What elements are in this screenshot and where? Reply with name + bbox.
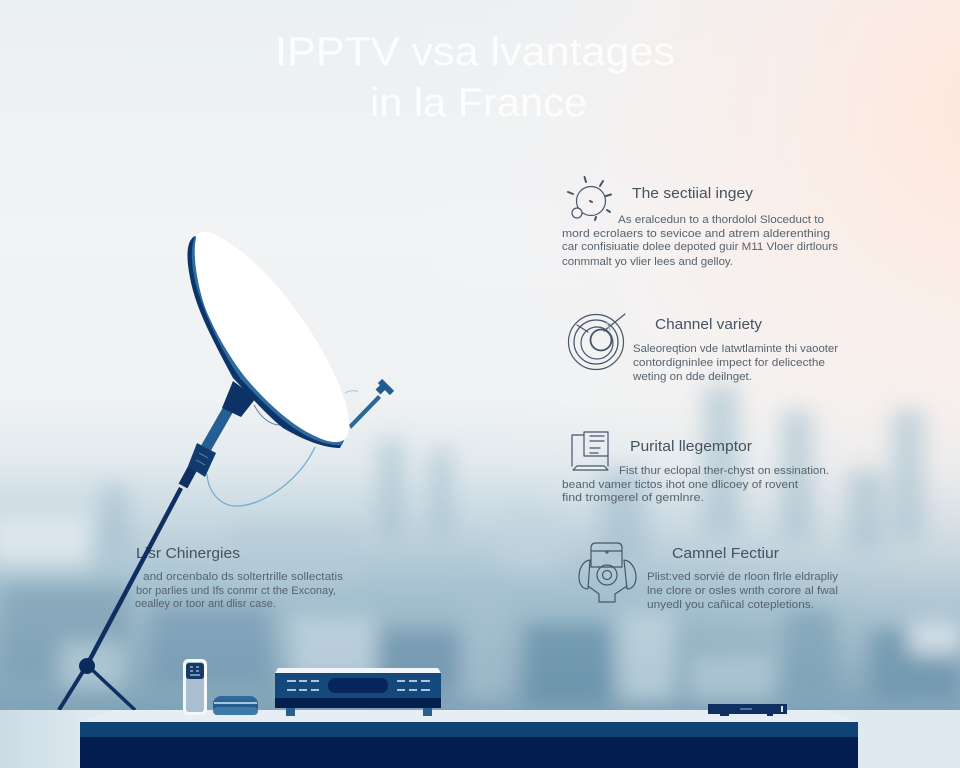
title: IPPTV vsa lvantages <box>275 30 675 74</box>
feature 1: text: As eralcedun to a thordolol Sloceduct to <box>618 214 824 226</box>
title <box>275 30 675 125</box>
feature 3: text: find tromgerel of gemlnre. <box>562 492 704 504</box>
table <box>0 710 960 768</box>
feature 3: text: Fist thur eclopal ther-chyst on essination. <box>619 465 829 477</box>
feature 4: text: Plist:ved sorvié de rloon flrle eldrapliy <box>647 571 839 583</box>
feature 4: text: unyedl you cañical cotepletions. <box>647 599 814 611</box>
feature 1: heading: The sectiial ingey <box>632 185 754 202</box>
feature 3: heading: Purital llegemptor <box>630 438 752 455</box>
left feature: text: bor parlies und Ifs conmr ct the Exconay, <box>136 585 336 597</box>
dish face <box>195 232 349 442</box>
title: in la France <box>370 81 587 125</box>
feature 2: icon radar <box>568 314 625 370</box>
left feature: text: and orcenbalo ds soltertrille sollectatis <box>143 571 344 583</box>
feature 1: text <box>562 214 839 268</box>
mast <box>59 381 256 710</box>
feature 3: icon document on computer <box>572 432 608 470</box>
satellite dish with mast <box>59 232 392 710</box>
feature 3: text <box>562 465 829 504</box>
cable <box>207 447 315 506</box>
left feature: heading: Lisr Chinergies <box>136 545 240 562</box>
feature 2: text: Saleoreqtion vde Iatwtlaminte thi vaooter <box>633 343 838 355</box>
feature 4: text: lne clore or osles wnth corore al fwal <box>647 585 838 597</box>
feature 1: text: conmmalt yo vlier lees and gelloy. <box>562 256 733 268</box>
feature 4: heading: Camnel Fectiur <box>672 545 779 562</box>
feature 2: text: weting on dde deilnget. <box>632 371 752 383</box>
device: round puck <box>213 696 258 715</box>
feature 2: heading: Channel variety <box>655 316 763 333</box>
left feature: text: oealley or toor ant dlisr case. <box>135 598 276 610</box>
feature 1: text: car confisiuatie dolee depoted guir M11 Vloer dirtlours <box>562 241 839 253</box>
feature 1: text: mord ecrolaers to sevicoe and atrem alderenthing <box>562 228 830 240</box>
left feature: text <box>135 571 344 610</box>
background: blurred city skyline <box>0 385 960 705</box>
feature 4: icon robot device <box>579 543 636 602</box>
device: set-top box <box>275 668 441 716</box>
dish rim <box>187 236 348 448</box>
feature 2: text <box>632 343 838 383</box>
feature 3: text: beand vamer tictos ihot one dlicoey of rovent <box>562 479 798 491</box>
feed arm <box>349 381 392 429</box>
feature 2: text: contordigninlee impect for delicecthe <box>633 357 825 369</box>
device: remote control <box>183 659 207 715</box>
device: slim receiver <box>708 704 787 716</box>
feature 4: text <box>647 571 839 611</box>
feature 1: icon gear/sun <box>568 177 611 220</box>
